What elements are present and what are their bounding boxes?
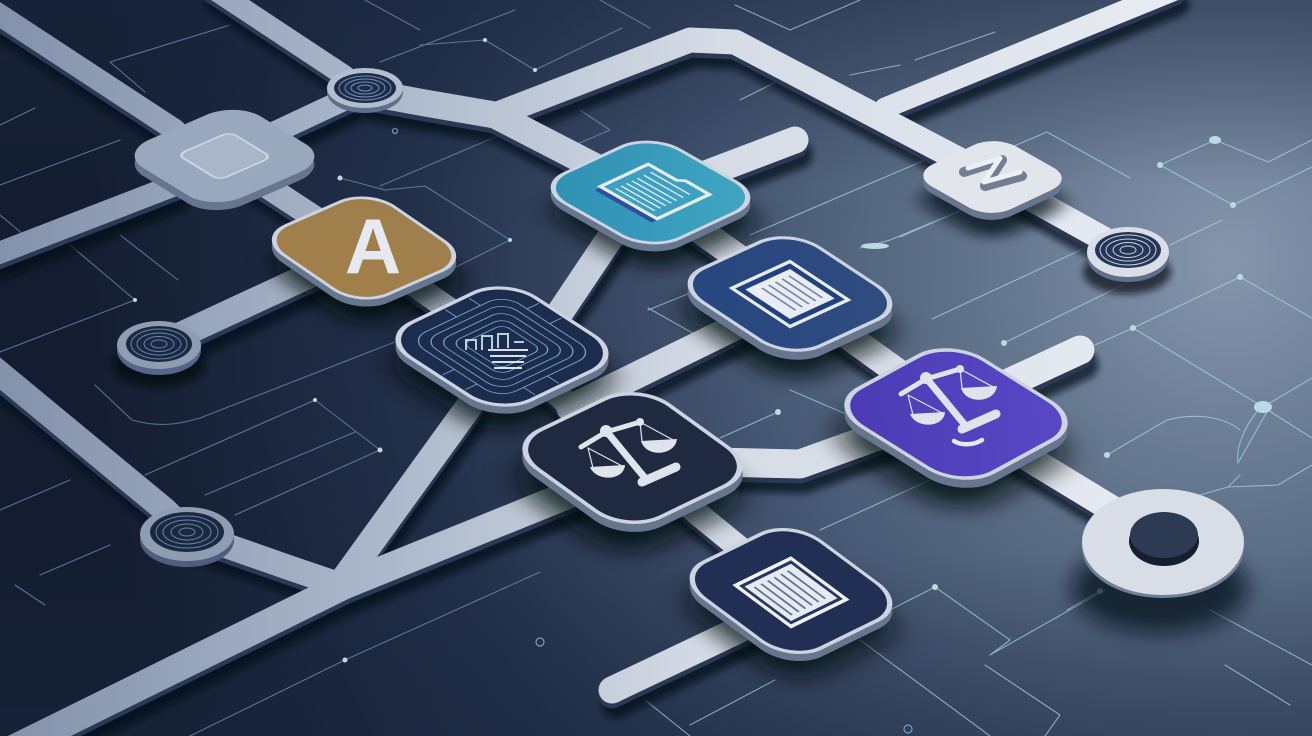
icon: chip centre lines [488, 350, 528, 368]
tile: violet scales [820, 337, 1088, 519]
node: ring bottom left [140, 507, 234, 567]
icon: document [736, 558, 846, 626]
node: ring top [327, 68, 403, 113]
icon: letter A: A [345, 202, 401, 290]
tile: circuit chip [376, 276, 628, 441]
node: ring right [1083, 227, 1171, 294]
icon: scales of justice [581, 418, 677, 482]
node: ring left [113, 321, 205, 387]
icon: document [594, 162, 710, 223]
circuit nodes [133, 38, 1272, 662]
icon: curved mark [954, 440, 982, 444]
icon: framed document [732, 261, 848, 327]
tile: white glyph [911, 135, 1074, 243]
tile: gold A [255, 188, 477, 332]
tile: bottom document [671, 517, 911, 689]
circuit traces: left [0, 0, 650, 736]
tile: teal document [533, 131, 772, 278]
node: grey junction tile [119, 102, 330, 218]
small rings [392, 128, 912, 733]
icon: scales of justice [901, 365, 997, 429]
circuit traces: right [600, 0, 1312, 736]
node: large terminal [1072, 489, 1248, 633]
icon: circuit pattern [386, 281, 618, 412]
tile: navy document [669, 226, 911, 388]
icon: angular mark [964, 158, 1022, 186]
tile: dark scales [499, 381, 762, 563]
